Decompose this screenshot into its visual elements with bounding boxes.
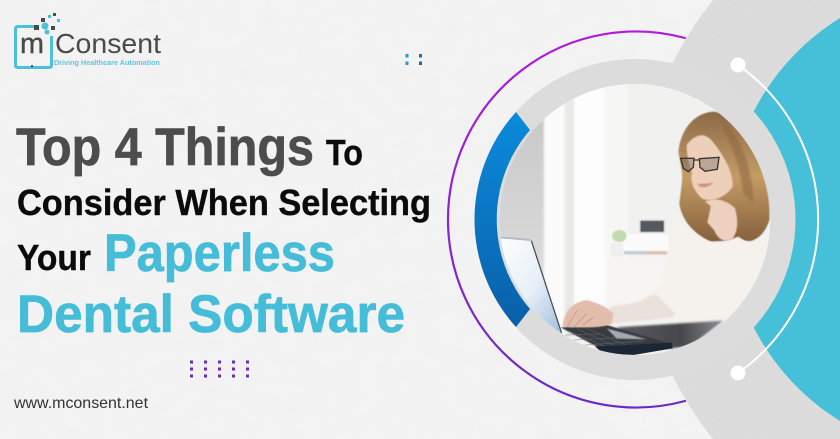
cyan circle: [728, 18, 840, 421]
laptop screen: [500, 236, 562, 334]
glasses: [681, 157, 719, 172]
photo: woman at laptop: [495, 80, 780, 360]
purple arc: [448, 31, 685, 407]
office background: [497, 80, 768, 340]
heading word: Paperless: Paperless: [104, 224, 335, 283]
big grey circle: [636, 0, 840, 439]
heading line 4: Dental Software: [17, 285, 405, 344]
typing hand: [563, 300, 613, 327]
heading word: To: To: [326, 132, 363, 173]
heading line 2: Consider When Selecting: [17, 182, 431, 223]
logo: [16, 13, 161, 68]
hair shadow strand: [726, 128, 754, 202]
heading word: Your: Your: [17, 237, 91, 278]
white arc with end dots: [730, 58, 818, 380]
website url: www.mconsent.net: [13, 395, 149, 412]
shelf with monitor and plant: [611, 219, 668, 257]
purple dots: [190, 360, 249, 378]
glass desk: [617, 321, 723, 348]
laptop base: [595, 343, 673, 355]
logo wordmark: Consent: [55, 28, 161, 59]
laptop side edge: [531, 241, 562, 333]
grey circle grain: [636, 0, 840, 439]
laptop reflections: [607, 328, 647, 339]
keyboard keys: [565, 328, 643, 347]
keyboard: [561, 325, 672, 348]
shirt: [694, 231, 761, 302]
chin hand: [705, 199, 737, 241]
mouth: [697, 183, 714, 187]
heading line 1: Top 4 Things: [16, 118, 314, 177]
laptop top edge: [500, 237, 531, 240]
grey photo ring: [487, 72, 783, 368]
heading: [16, 118, 431, 344]
face: [687, 135, 733, 200]
logo tagline: Driving Healthcare Automation: [54, 60, 160, 67]
logo m: m: [20, 28, 44, 60]
sleeve: [610, 293, 675, 324]
hair: [678, 112, 770, 242]
logo tablet frame: [16, 26, 52, 68]
logo pixels: [31, 13, 60, 67]
blue ring segment: [475, 112, 530, 327]
fingers: [567, 310, 593, 327]
blue dots: [406, 54, 422, 65]
